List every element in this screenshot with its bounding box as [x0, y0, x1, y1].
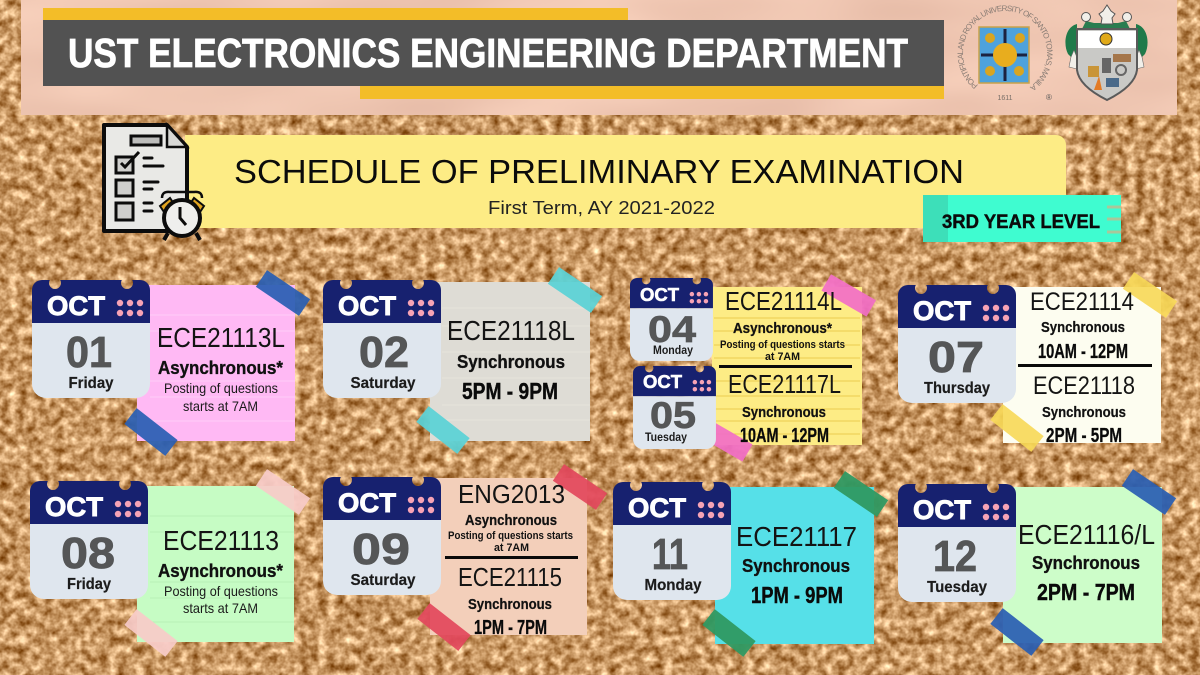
- bottom yellow accent bar: [360, 86, 944, 99]
- exam details: first: at 7AM: [765, 351, 800, 363]
- calendar: 07: [928, 333, 984, 382]
- exam details: second: 2PM - 5PM: [1046, 425, 1122, 447]
- tape: [1123, 272, 1177, 318]
- exam details: [736, 521, 857, 608]
- exam card: Oct 11: [613, 471, 888, 657]
- exam details: first: at 7AM: [494, 542, 529, 554]
- title: UST ELECTRONICS ENGINEERING DEPARTMENT: [68, 30, 908, 76]
- header band: [21, 0, 1177, 115]
- calendar: 09: [352, 525, 410, 574]
- exam details: Asynchronous*: [158, 561, 283, 581]
- exam card: Oct 09: [323, 464, 607, 651]
- calendar: Oct 04: OCT: [640, 285, 679, 305]
- note paper: [1003, 287, 1161, 443]
- calendar: Tuesday: [927, 579, 987, 596]
- exam details: second: [728, 369, 841, 447]
- tape: [1122, 469, 1176, 515]
- calendar: 01: [66, 328, 112, 377]
- tape: [553, 464, 607, 510]
- exam details: first: Synchronous: [1041, 319, 1125, 336]
- exam details: first: [1030, 288, 1134, 363]
- tape: [256, 469, 310, 515]
- exam details: first: 10AM - 12PM: [1038, 341, 1128, 363]
- exam details: first: ENG2013: [458, 479, 565, 509]
- exam details: first: ECE21114L: [725, 286, 842, 316]
- heading: SCHEDULE OF PRELIMINARY EXAMINATION: [234, 153, 964, 190]
- tape: [548, 267, 602, 313]
- logo: university seal: PONTIFICAL AND ROYAL UNIVERSITY OF SANTO TOMAS, MANILA: [958, 6, 1053, 90]
- exam details: Posting of questions: [164, 583, 278, 599]
- calendar: [323, 280, 441, 398]
- exam card: Oct 08: [30, 469, 310, 657]
- calendar: Saturday: [350, 572, 416, 589]
- note paper: [1003, 487, 1162, 643]
- exam card: Oct 01: [32, 270, 310, 456]
- logo: department crest: [1065, 5, 1148, 100]
- exam details: second: Synchronous: [1042, 404, 1126, 421]
- note paper: [430, 478, 587, 635]
- exam details: second: Synchronous: [742, 404, 826, 421]
- note paper: [137, 486, 294, 642]
- note paper: [137, 285, 295, 441]
- exam details: first: Asynchronous: [465, 512, 557, 529]
- calendar: 02: [359, 328, 409, 377]
- calendar: OCT: [338, 488, 397, 518]
- calendar: OCT: [913, 495, 972, 525]
- tape: [256, 270, 310, 316]
- yellow banner: [185, 135, 1066, 228]
- calendar: Monday: [644, 577, 702, 594]
- calendar: Oct 04: Monday: [653, 345, 694, 357]
- exam details: 2PM - 7PM: [1037, 579, 1135, 605]
- logo: university seal: ®: [1046, 93, 1052, 102]
- divider: [719, 365, 852, 368]
- divider: [1018, 364, 1152, 367]
- exam details: Asynchronous*: [158, 358, 283, 378]
- sub heading: First Term, AY 2021-2022: [488, 198, 715, 218]
- exam details: ECE21113: [163, 525, 279, 556]
- dark title bar: [43, 20, 944, 86]
- tape: [821, 274, 876, 317]
- exam details: ECE21117: [736, 521, 857, 552]
- exam details: first: [448, 479, 573, 554]
- exam details: Posting of questions: [164, 380, 278, 396]
- calendar: 11: [652, 530, 688, 579]
- divider: [445, 556, 578, 559]
- exam details: [157, 322, 285, 414]
- exam details: Synchronous: [1032, 553, 1140, 573]
- calendar: [898, 484, 1016, 602]
- exam details: second: ECE21117L: [728, 369, 841, 399]
- calendar: Oct 04: 04: [648, 309, 696, 350]
- calendar: [323, 477, 441, 595]
- calendar: Saturday: [350, 375, 416, 392]
- exam details: second: [458, 562, 562, 639]
- exam details: [158, 525, 283, 616]
- calendar: OCT: [338, 291, 397, 321]
- exam card: Oct 07: [898, 272, 1177, 452]
- calendar: [898, 285, 1016, 403]
- exam details: second: [1033, 372, 1135, 447]
- calendar: Oct 05: [633, 366, 716, 449]
- exam details: Synchronous: [457, 352, 565, 372]
- exam card: Oct 02: [323, 267, 602, 454]
- exam details: ECE21113L: [157, 322, 285, 353]
- exam details: 1PM - 9PM: [751, 582, 843, 608]
- exam details: first: Asynchronous*: [733, 320, 832, 337]
- exam details: second: Synchronous: [468, 596, 552, 613]
- exam details: second: ECE21118: [1033, 372, 1135, 400]
- exam details: ECE21118L: [447, 315, 575, 346]
- calendar: Friday: [68, 375, 114, 392]
- peach paper strip: [21, 0, 1177, 115]
- icon: checklist with alarm clock: [104, 125, 204, 240]
- calendar: OCT: [45, 492, 104, 522]
- calendar: [30, 481, 148, 599]
- calendar: 08: [61, 529, 115, 578]
- exam details: [1018, 519, 1155, 605]
- schedule heading panel: [185, 135, 1066, 228]
- calendar: Oct 04: [630, 278, 713, 361]
- exam details: first: ECE21114: [1030, 288, 1134, 316]
- exam details: first: Posting of questions starts: [448, 530, 573, 542]
- exam details: ECE21116/L: [1018, 519, 1155, 550]
- exam details: first: [720, 286, 845, 363]
- exam details: [447, 315, 575, 404]
- exam details: 5PM - 9PM: [462, 378, 558, 404]
- exam details: second: ECE21115: [458, 562, 562, 592]
- tape: [834, 471, 888, 517]
- calendar: Oct 05: 05: [650, 395, 696, 436]
- exam details: starts at 7AM: [183, 398, 258, 414]
- calendar: Friday: [67, 576, 111, 593]
- calendar: OCT: [913, 296, 972, 326]
- logo: university seal: 1611: [997, 95, 1013, 102]
- year level tag: [923, 195, 1121, 242]
- note paper: [712, 287, 862, 445]
- calendar: Oct 05: Tuesday: [645, 432, 688, 444]
- exam card: Oct 12: [898, 469, 1176, 656]
- exam details: first: Posting of questions starts: [720, 339, 845, 351]
- exam details: second: 1PM - 7PM: [474, 617, 547, 639]
- exam details: Synchronous: [742, 556, 850, 576]
- calendar: Thursday: [924, 380, 990, 397]
- calendar: [613, 482, 731, 600]
- note paper: [430, 282, 590, 441]
- exam card: Oct 04 and Oct 05: [630, 274, 876, 462]
- calendar: 12: [933, 532, 977, 581]
- note paper: [715, 487, 874, 644]
- year level tag: 3RD YEAR LEVEL: [942, 212, 1100, 233]
- calendar: Oct 05: OCT: [643, 372, 682, 392]
- exam details: starts at 7AM: [183, 600, 258, 616]
- exam details: second: 10AM - 12PM: [740, 425, 829, 447]
- top yellow accent bar: [43, 8, 628, 20]
- calendar: [32, 280, 150, 398]
- calendar: OCT: [47, 291, 106, 321]
- calendar: OCT: [628, 493, 687, 523]
